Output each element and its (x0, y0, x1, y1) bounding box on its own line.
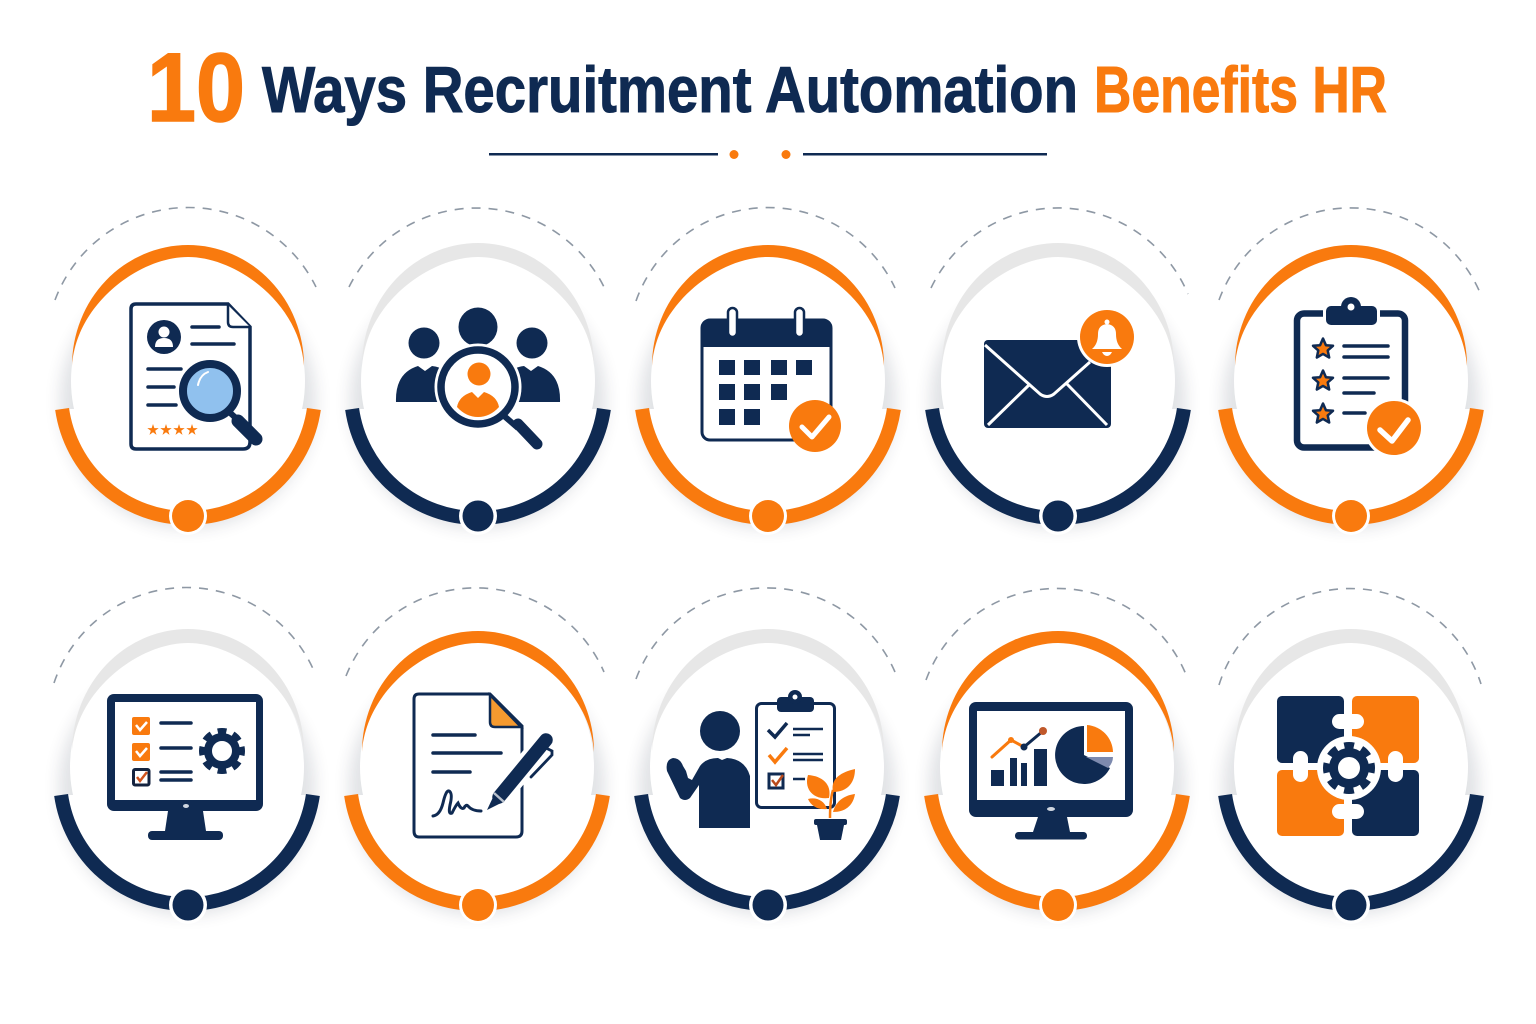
icon: calendar with check (702, 308, 841, 452)
title: Ways Recruitment Automation (262, 53, 1078, 126)
icon: envelope with bell (984, 307, 1137, 428)
title: Benefits HR (1094, 53, 1387, 126)
icon: monitor with checklist and gear (107, 694, 263, 840)
icon: people under magnifier (396, 308, 560, 444)
title divider (489, 150, 1047, 159)
panel: digital offer signing (346, 588, 605, 924)
title (147, 33, 1387, 142)
panel: interview scheduling (636, 208, 896, 535)
icon: clipboard with stars (1297, 297, 1424, 458)
panel: system integration (1219, 589, 1481, 924)
panel: resume screening (55, 207, 316, 535)
panel: email notifications (930, 208, 1188, 535)
icon: document with pen (414, 694, 552, 837)
panel: analytics dashboard (926, 588, 1187, 924)
panel: candidate sourcing (349, 208, 606, 535)
icon: resume with magnifier (131, 304, 256, 449)
panel: candidate rating checklist (1219, 208, 1481, 535)
panel: workflow automation (54, 588, 315, 924)
icon: person with clipboard and plant (667, 690, 855, 840)
panel: onboarding checklist (636, 588, 895, 924)
title: 10 (147, 33, 245, 142)
icon: puzzle pieces with gear (1277, 696, 1419, 836)
icon: monitor with charts (969, 702, 1133, 840)
